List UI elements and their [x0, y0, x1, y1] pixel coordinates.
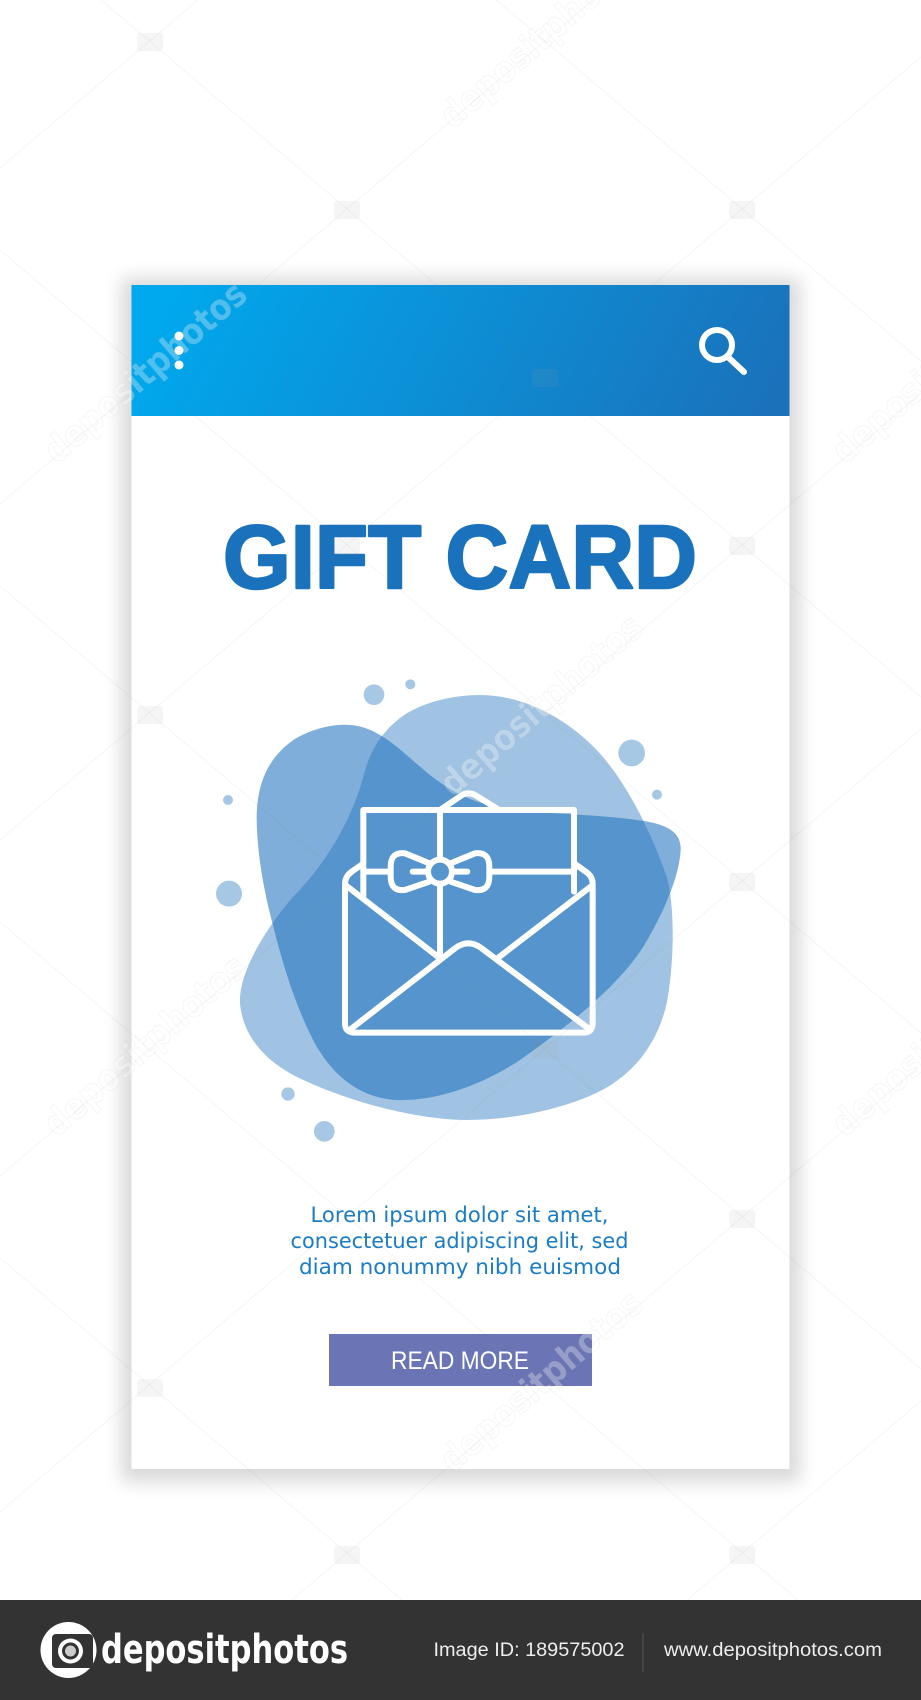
blob: front darker [257, 725, 681, 1100]
panel: header bar [132, 285, 790, 416]
icon: menu dots [174, 332, 184, 370]
icon: open envelope with gift card [345, 793, 593, 1033]
title: GIFT CARD [223, 508, 697, 608]
body text: Lorem ipsum dolor sit amet, [310, 1203, 608, 1227]
decorative bubbles [216, 679, 662, 1142]
body text: consectetuer adipiscing elit, sed [290, 1229, 628, 1253]
icon: search magnifier [702, 330, 744, 372]
stock watermark overlay: depositphotos [432, 607, 651, 805]
image id: Image ID: 189575002 [434, 1640, 624, 1661]
watermark camera marks [137, 33, 755, 1564]
icon: camera logo [40, 1622, 96, 1678]
button: read more [329, 1334, 592, 1386]
panel: footer bar [0, 1600, 921, 1700]
body text [290, 1203, 628, 1279]
illustration: gift card envelope on blobs [216, 679, 681, 1142]
stock watermark overlay: depositphotos [36, 947, 255, 1145]
stock watermark overlay: depositphotos [36, 274, 255, 472]
blob: back light [240, 695, 673, 1120]
stock watermark overlay: depositphotos [432, 1283, 651, 1481]
panel: mobile screen card [132, 285, 790, 1469]
card shadow [121, 278, 800, 1482]
button: read more: READ MORE [391, 1347, 529, 1375]
website: www.depositphotos.com [663, 1640, 882, 1661]
body text: diam nonummy nibh euismod [299, 1255, 621, 1279]
logo wordmark: depositphotos [101, 1627, 348, 1673]
